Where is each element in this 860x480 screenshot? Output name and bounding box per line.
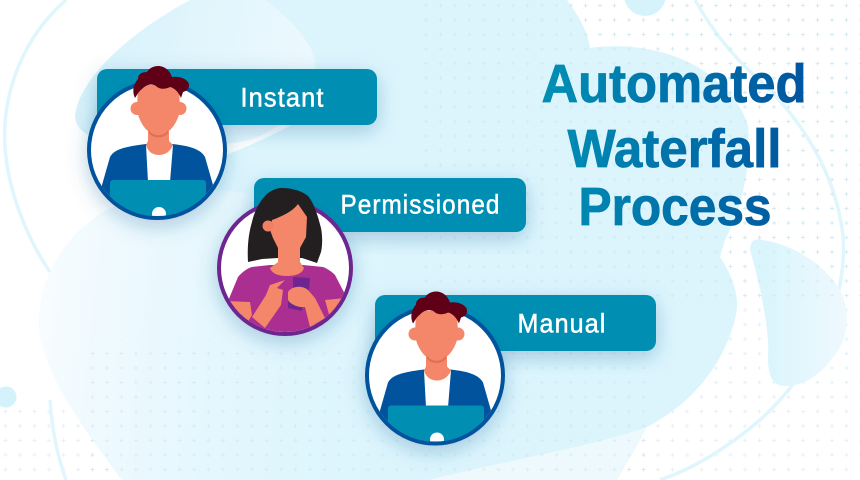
shirt xyxy=(424,370,451,408)
label bar: Instant: Instant xyxy=(240,82,324,112)
shirt xyxy=(146,145,173,182)
small circle: left xyxy=(0,386,16,408)
avatar: woman xyxy=(219,188,351,340)
chin shadow xyxy=(149,130,168,138)
phone xyxy=(288,277,310,311)
label bar: Permissioned xyxy=(254,178,526,232)
label bar: Manual xyxy=(375,295,656,351)
title xyxy=(542,54,806,237)
blob: upper left xyxy=(75,0,315,147)
small circle: top xyxy=(624,0,666,16)
title: Waterfall xyxy=(568,119,782,179)
jacket xyxy=(102,144,213,216)
jacket xyxy=(380,370,491,442)
title: Process xyxy=(578,177,772,237)
face xyxy=(415,310,458,360)
arms xyxy=(230,298,342,320)
hand and right forearm xyxy=(288,287,325,327)
label bar: Instant xyxy=(97,69,377,125)
ears xyxy=(408,328,464,340)
laptop xyxy=(110,180,206,216)
neck xyxy=(270,238,304,276)
neck xyxy=(146,125,173,155)
laptop logo xyxy=(152,207,166,216)
hair xyxy=(411,292,467,324)
face xyxy=(270,204,307,254)
back hair xyxy=(248,188,322,263)
face xyxy=(137,85,180,135)
avatar: man bottom xyxy=(367,292,503,456)
title: Automated xyxy=(542,54,806,114)
neck xyxy=(424,350,451,380)
chin shadow xyxy=(427,356,446,363)
avatar: man top xyxy=(89,66,225,230)
ear xyxy=(262,220,274,232)
blob: faded lower left xyxy=(39,190,430,480)
forearm left xyxy=(252,280,285,328)
blob: faded bottom tail xyxy=(430,427,647,480)
laptop xyxy=(388,406,484,442)
blob: right xyxy=(750,239,847,386)
label bar: Permissioned: Permissioned xyxy=(340,190,500,220)
laptop logo xyxy=(430,432,444,442)
hair xyxy=(133,66,189,98)
label bar: Manual: Manual xyxy=(518,308,606,338)
top xyxy=(229,265,344,332)
ears xyxy=(130,102,186,115)
